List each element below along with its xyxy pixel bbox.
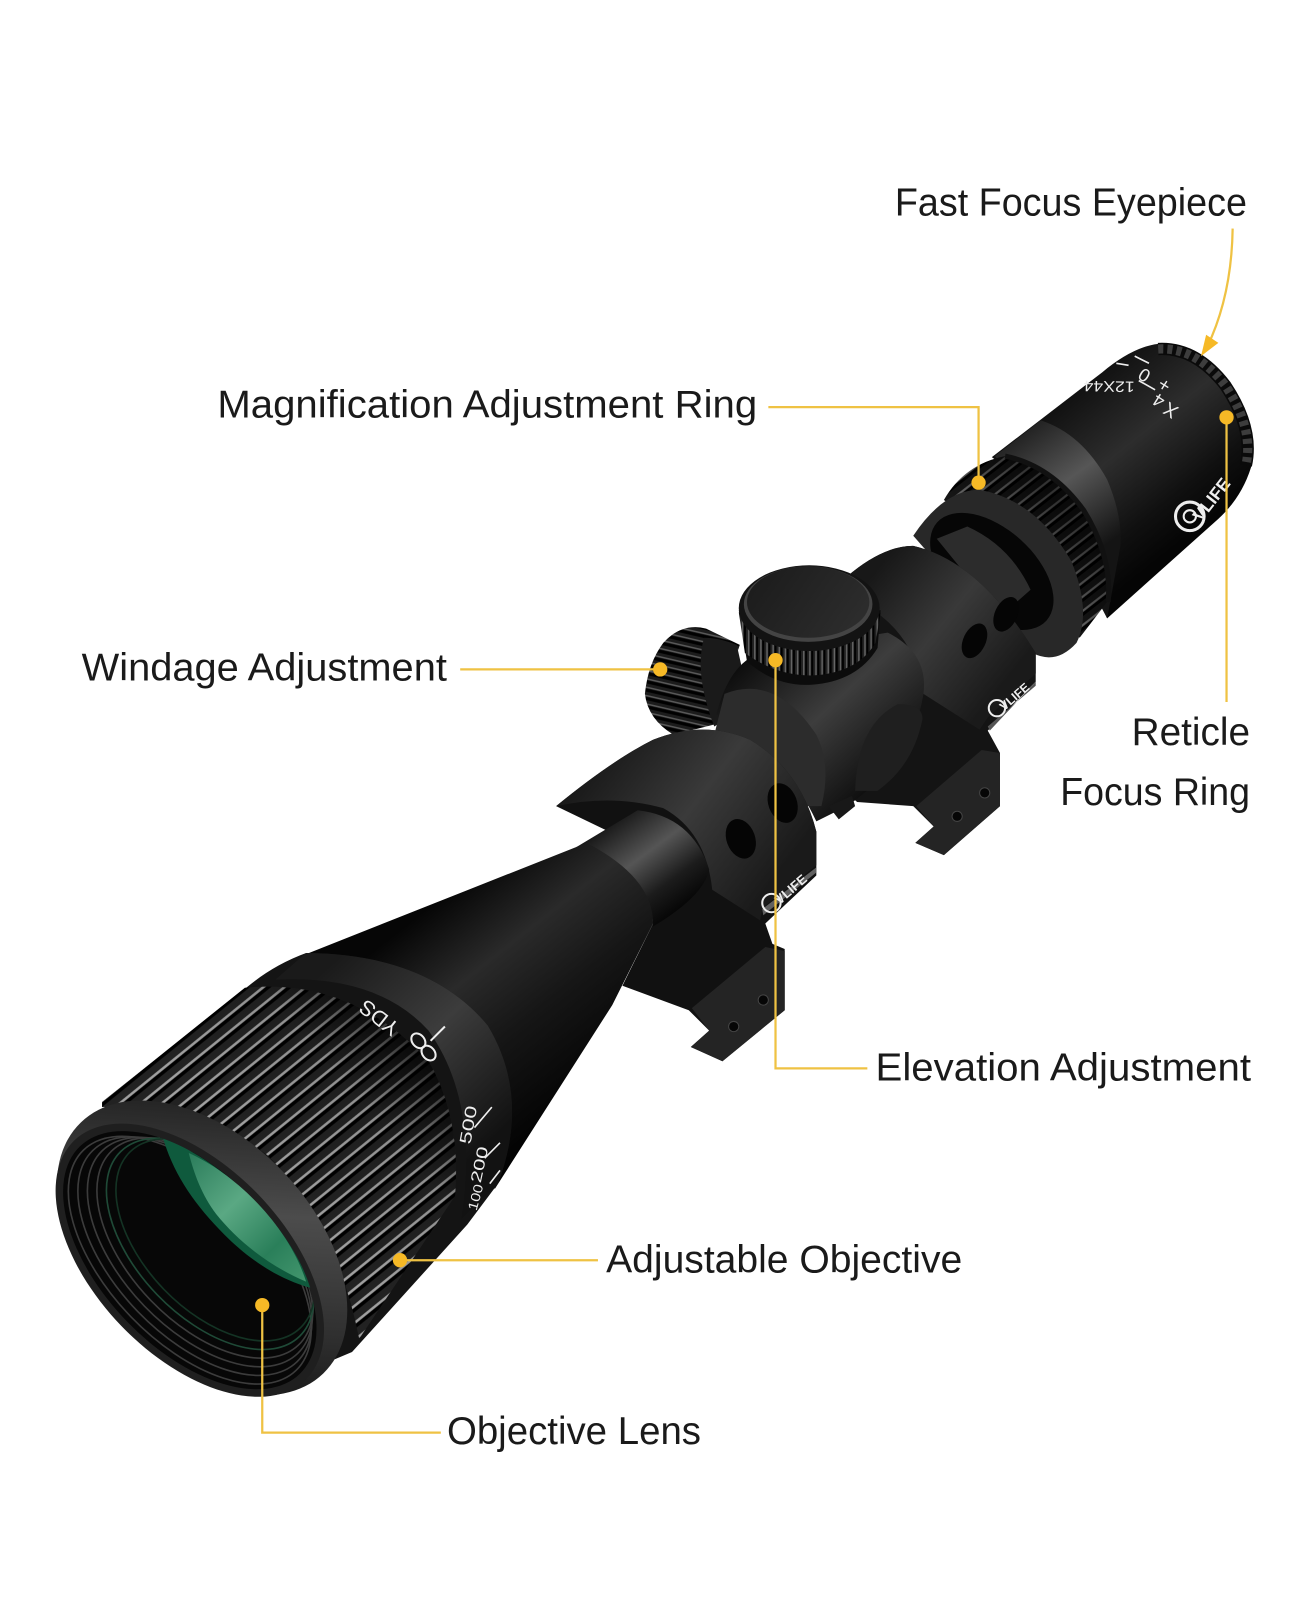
rear mount [827, 546, 1036, 855]
elevation knob [739, 565, 881, 685]
magnification ring [909, 456, 1109, 657]
callout: fast focus eyepiece [895, 181, 1247, 356]
distance scale markings: YDS [355, 994, 404, 1040]
callout: reticle focus ring: Reticle [1132, 711, 1250, 754]
riflescope [1, 344, 1253, 1451]
rear mount logo: VLIFE [997, 680, 1032, 713]
callout: reticle focus ring: Focus Ring [1060, 771, 1250, 814]
objective tube [577, 810, 709, 927]
rear screws [952, 788, 990, 821]
eyepiece markings: 12X44 [1083, 377, 1135, 395]
eyepiece [992, 344, 1253, 618]
eyepiece markings: X [1160, 397, 1182, 423]
callout: fast focus eyepiece: Fast Focus Eyepiece [895, 181, 1247, 224]
callout: objective lens [255, 1298, 701, 1453]
windage knob [645, 627, 750, 735]
distance scale markings [355, 994, 500, 1212]
objective bell body [102, 953, 512, 1393]
distance scale markings: 100 [465, 1182, 486, 1212]
turret saddle [714, 633, 924, 821]
brand logo: VLIFE [1188, 474, 1234, 525]
callout: elevation adjustment: Elevation Adjustment [876, 1047, 1251, 1090]
callout: adjustable objective [393, 1238, 962, 1281]
callout: objective lens: Objective Lens [447, 1410, 701, 1453]
callout: windage adjustment: Windage Adjustment [82, 647, 447, 690]
knurled focus ring [102, 987, 456, 1339]
callout: magnification adjustment ring [217, 383, 986, 490]
mount holes [957, 593, 1024, 662]
inner threads [68, 1136, 314, 1385]
front screws [729, 995, 768, 1032]
eyepiece markings: + [1154, 372, 1175, 397]
callout: magnification adjustment ring: Magnification Adjustment Ring [217, 383, 757, 426]
front mount holes [720, 779, 803, 863]
front mount [556, 730, 816, 1061]
objective lens [163, 1139, 310, 1288]
distance scale markings: 200 [468, 1145, 492, 1185]
front lens ring [56, 1100, 348, 1397]
eyepiece markings [1083, 356, 1182, 423]
taper bell [306, 843, 653, 1189]
callout: elevation adjustment [768, 653, 1251, 1090]
callout: windage adjustment [82, 647, 667, 690]
inner tube [937, 527, 1031, 612]
eyepiece markings: 0 [1134, 364, 1154, 387]
eyepiece markings: 4 [1149, 389, 1168, 412]
callout: reticle focus ring [1060, 410, 1250, 814]
distance scale markings: 500 [457, 1104, 481, 1146]
front mount logo: VLIFE [772, 871, 810, 907]
callout: adjustable objective: Adjustable Objective [606, 1238, 962, 1281]
